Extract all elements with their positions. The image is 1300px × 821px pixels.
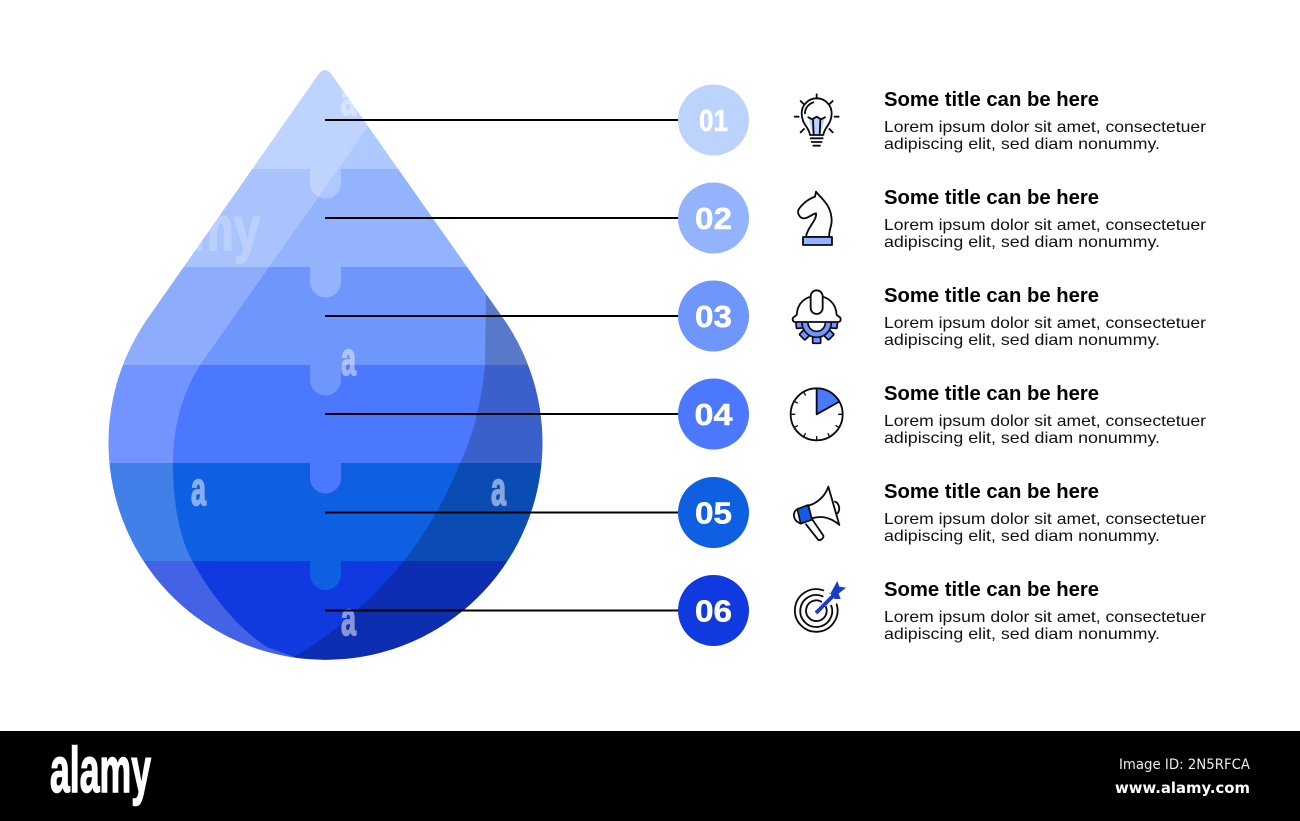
water drop chart: my — [192, 195, 260, 264]
text block 05: Lorem ipsum dolor sit amet, consectetuer — [884, 511, 1207, 528]
step 01 badge — [678, 84, 749, 156]
text block 02 — [884, 187, 1207, 251]
footer bar — [0, 731, 1300, 821]
text block 06: adipiscing elit, sed diam nonummy. — [884, 626, 1160, 643]
step 04 badge: 04 — [694, 397, 733, 432]
text block 04: adipiscing elit, sed diam nonummy. — [884, 430, 1160, 447]
icon: clock — [791, 388, 843, 440]
step 03 badge — [678, 280, 749, 352]
water drop chart: a — [341, 592, 356, 645]
text block 05 — [884, 481, 1207, 545]
step 01 badge: 01 — [699, 103, 728, 138]
step 05 badge — [678, 477, 749, 548]
text block 02: adipiscing elit, sed diam nonummy. — [884, 234, 1160, 251]
icon: target and arrow — [795, 581, 846, 632]
step 06 badge: 06 — [695, 594, 732, 628]
water drop chart: a — [341, 72, 356, 125]
watermark letter over badges: a — [690, 332, 705, 385]
connector lines — [325, 120, 680, 610]
water drop chart: a — [491, 462, 506, 515]
text block 01: adipiscing elit, sed diam nonummy. — [884, 136, 1160, 153]
footer bar: alamy — [50, 734, 151, 806]
icon: megaphone — [794, 487, 839, 540]
text block 02: Some title can be here — [884, 187, 1099, 209]
text block 04: Lorem ipsum dolor sit amet, consectetuer — [884, 413, 1207, 430]
text block 06 — [884, 579, 1207, 643]
text block 05: adipiscing elit, sed diam nonummy. — [884, 528, 1160, 545]
footer bar: www.alamy.com — [1115, 779, 1250, 797]
text block 05: Some title can be here — [884, 481, 1099, 503]
text block 02: Lorem ipsum dolor sit amet, consectetuer — [884, 217, 1207, 234]
text block 06: Some title can be here — [884, 579, 1099, 601]
step 06 badge — [678, 575, 749, 646]
text block 04 — [884, 383, 1207, 447]
step 02 badge: 02 — [695, 201, 732, 236]
footer bar: Image ID: 2N5RFCA — [1119, 757, 1250, 773]
text block 06: Lorem ipsum dolor sit amet, consectetuer — [884, 609, 1207, 626]
step 02 badge — [678, 182, 749, 254]
step 03 badge: 03 — [695, 299, 732, 334]
water drop chart — [108, 70, 542, 660]
water drop chart: a — [191, 462, 206, 515]
text block 03: Lorem ipsum dolor sit amet, consectetuer — [884, 315, 1207, 332]
step 05 badge: 05 — [695, 496, 732, 530]
water drop chart: a — [341, 332, 356, 385]
text block 01 — [884, 89, 1207, 153]
text block 03 — [884, 285, 1207, 349]
text block 03: adipiscing elit, sed diam nonummy. — [884, 332, 1160, 349]
icon: light bulb — [795, 94, 839, 146]
step 04 badge — [678, 378, 749, 450]
icon: chess knight — [798, 192, 832, 245]
icon: helmet and gear — [793, 290, 841, 343]
text block 04: Some title can be here — [884, 383, 1099, 405]
text block 01: Lorem ipsum dolor sit amet, consectetuer — [884, 119, 1207, 136]
text block 01: Some title can be here — [884, 89, 1099, 111]
text block 03: Some title can be here — [884, 285, 1099, 307]
